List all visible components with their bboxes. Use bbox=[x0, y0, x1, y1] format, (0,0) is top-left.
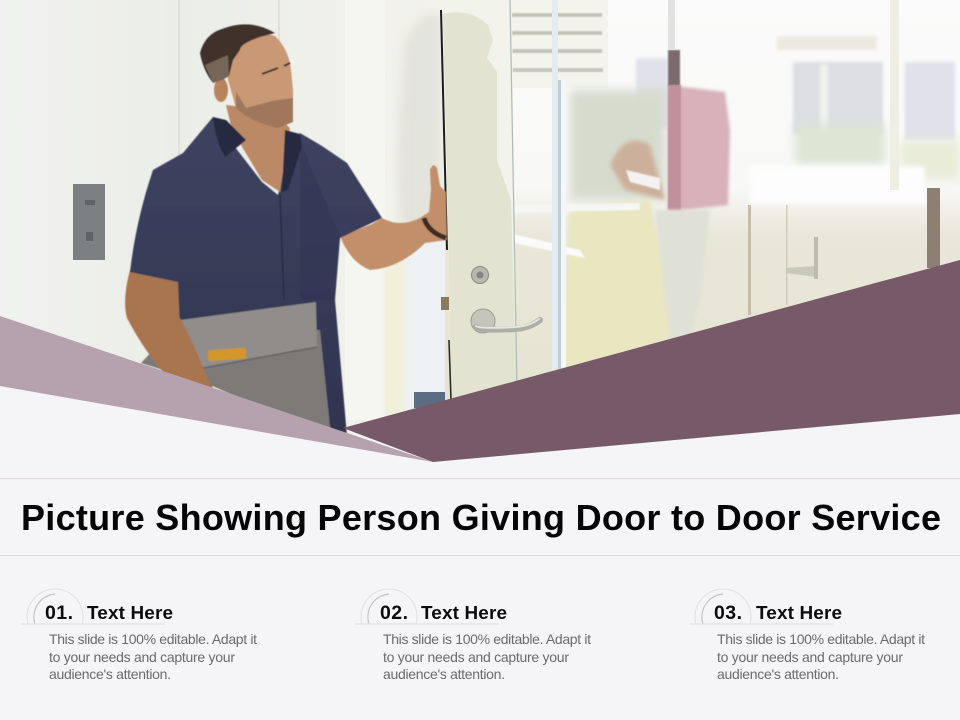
right arm and hand bbox=[340, 165, 447, 270]
item text: to your needs and capture your bbox=[717, 649, 903, 665]
photo: man holding a glass door bbox=[0, 0, 960, 470]
item 01 bbox=[21, 589, 261, 682]
watch bbox=[424, 218, 446, 238]
far door handle bbox=[788, 266, 814, 277]
collar bbox=[213, 117, 302, 192]
item text: This slide is 100% editable. Adapt it bbox=[383, 631, 591, 647]
hair bbox=[200, 24, 275, 83]
left arm bbox=[125, 270, 214, 392]
yellow reflection bbox=[566, 200, 669, 367]
eyes and eyebrow bbox=[262, 63, 290, 74]
item text: audience's attention. bbox=[383, 666, 505, 682]
item heading: Text Here bbox=[421, 603, 507, 624]
door handle bbox=[471, 309, 540, 333]
decorative dark mauve wedge bbox=[343, 260, 960, 462]
shirt bbox=[130, 117, 382, 436]
greenery reflection bbox=[570, 90, 960, 200]
pink reflection bbox=[610, 50, 730, 212]
window blinds reflection bbox=[512, 0, 608, 88]
white counter band bbox=[750, 166, 925, 204]
distant buildings bbox=[636, 36, 955, 140]
title: Picture Showing Person Giving Door to Door Service bbox=[21, 497, 941, 538]
item heading: Text Here bbox=[87, 603, 173, 624]
item heading: Text Here bbox=[756, 603, 842, 624]
office wall bbox=[26, 0, 445, 438]
badge: number with arcs bbox=[689, 589, 833, 624]
man bbox=[125, 24, 447, 436]
laptop bag bbox=[141, 302, 331, 436]
face bbox=[225, 33, 293, 128]
door lock bbox=[472, 266, 488, 284]
item text: audience's attention. bbox=[717, 666, 839, 682]
stubble bbox=[236, 92, 293, 128]
item text: to your needs and capture your bbox=[383, 649, 569, 665]
item text: This slide is 100% editable. Adapt it bbox=[717, 631, 925, 647]
elevator call panel bbox=[73, 184, 105, 260]
item text: audience's attention. bbox=[49, 666, 171, 682]
orange tag bbox=[208, 348, 246, 361]
badge: number with arcs: 01. bbox=[45, 602, 73, 624]
item 02 bbox=[355, 589, 595, 682]
neck bbox=[226, 105, 290, 192]
decorative light mauve wedge bbox=[0, 316, 433, 462]
badge: number with arcs: 02. bbox=[380, 602, 408, 624]
badge: number with arcs bbox=[21, 589, 165, 624]
forearm over bag bbox=[129, 318, 211, 386]
item text: This slide is 100% editable. Adapt it bbox=[49, 631, 257, 647]
glass panels and reflections bbox=[445, 0, 960, 400]
glass frames bbox=[552, 0, 558, 370]
badge: number with arcs: 03. bbox=[714, 602, 742, 624]
ear bbox=[214, 78, 228, 102]
item 03 bbox=[689, 589, 929, 682]
open door panel bbox=[441, 0, 540, 400]
badge: number with arcs bbox=[355, 589, 499, 624]
item text: to your needs and capture your bbox=[49, 649, 235, 665]
